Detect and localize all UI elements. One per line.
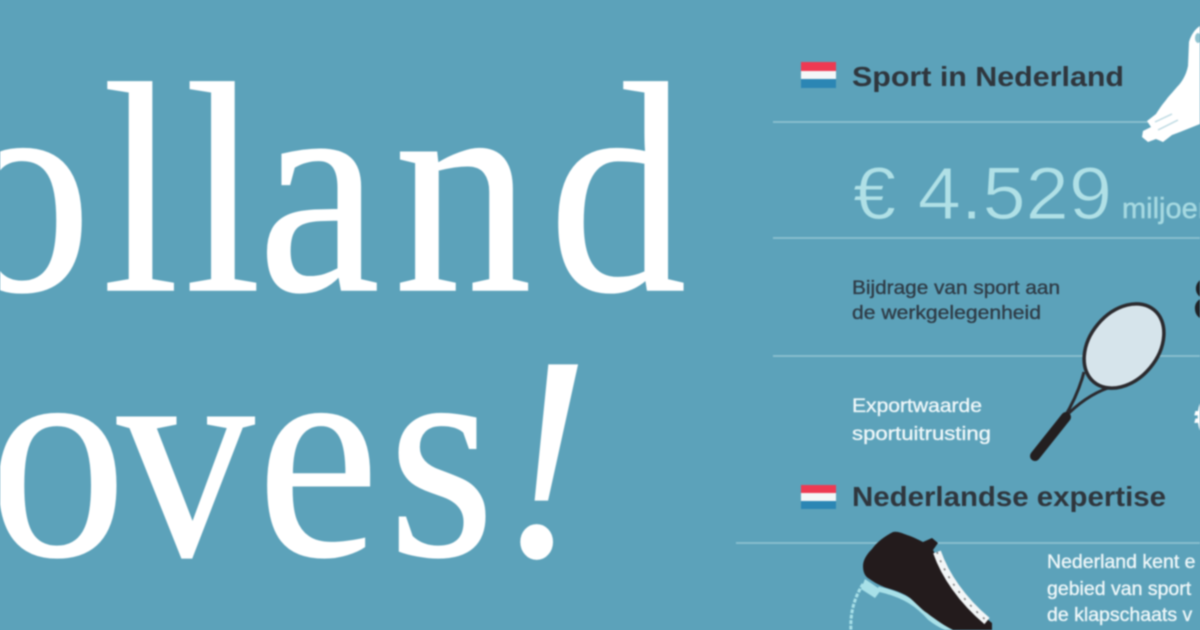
text: expertise paragraph, clipped: Nederland kent e <box>1047 551 1196 573</box>
text: export value <box>852 395 991 445</box>
panel: Nederlandse expertise <box>801 481 1196 630</box>
text: contribution to employment: Bijdrage van sport aan <box>852 277 1060 299</box>
title: Holland moves! <box>0 24 686 621</box>
text: expertise paragraph, clipped: gebied van sport <box>1047 578 1192 600</box>
text: contribution to employment <box>852 277 1060 324</box>
icon: map of the Netherlands <box>1142 26 1200 142</box>
text: expertise paragraph, clipped <box>1047 551 1196 626</box>
heading: Sport in Nederland: Sport in Nederland <box>852 61 1124 92</box>
text: expertise paragraph, clipped: de klapschaats v <box>1047 604 1193 626</box>
panel: sport in Nederland <box>801 26 1200 456</box>
icon: Dutch flag <box>801 62 836 88</box>
title line 2: ! <box>501 297 589 619</box>
text: contribution to employment: de werkgelegenheid <box>852 302 1041 324</box>
text: export value: sportuitrusting <box>852 423 991 445</box>
text: export value: Exportwaarde <box>852 395 982 417</box>
icon: klapschaats skate <box>851 532 992 630</box>
icon: Dutch flag <box>801 485 836 509</box>
icon: tennis racket <box>1035 288 1180 456</box>
heading: Nederlandse expertise: Nederlandse expertise <box>852 481 1166 512</box>
statistic: sports value: € 4.529 <box>853 152 1112 235</box>
